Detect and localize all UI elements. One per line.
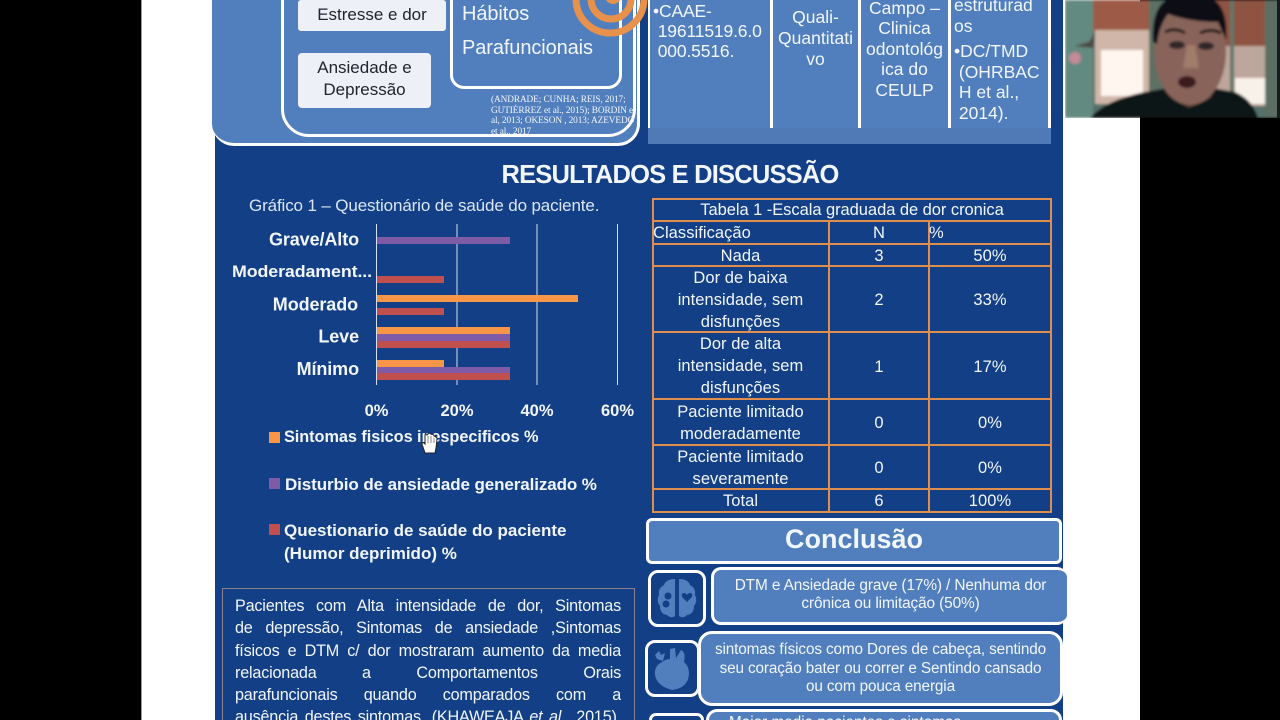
inner panel outline [281, 0, 636, 137]
row: low intensity: disfunções [701, 313, 780, 331]
poster background [215, 0, 1063, 720]
column: study type: vo [806, 49, 825, 69]
icon: hand cursor [422, 432, 438, 454]
conclusion box: anxiety: DTM e Ansiedade grave (17%) / Nenhuma dor [735, 577, 1046, 594]
box: anxiety and depression [298, 53, 431, 108]
row: high intensity: disfunções [701, 379, 780, 397]
conclusion box: physical symptoms: seu coração bater ou correr e Sentindo cansado [720, 660, 1041, 676]
table: chronic pain scale: N [873, 224, 885, 242]
column: CAAE: •CAAE- [653, 1, 712, 21]
person [1090, 0, 1258, 118]
column: instruments: H et al., [959, 82, 1019, 102]
bar chart [232, 224, 634, 420]
discussion lines: físicos e DTM c/ dor mostraram aumento da media [235, 642, 621, 660]
panel: introduction [212, 0, 640, 146]
table: chronic pain scale: 0 [874, 414, 884, 432]
discussion lines [235, 597, 621, 720]
table: chronic pain scale: 50% [973, 247, 1007, 265]
legend item: health questionnaire: (Humor deprimido) % [284, 544, 457, 563]
citation: GUTIÉRREZ et al., 2015); BORDIN et [491, 106, 635, 116]
table: chronic pain scale: % [929, 224, 944, 242]
header row: Classificação [653, 224, 751, 242]
column: instruments: (OHRBAC [959, 62, 1040, 82]
table: chronic pain scale: 17% [973, 358, 1007, 376]
axis labels: 60% [601, 402, 634, 420]
legend item: health questionnaire [269, 521, 566, 563]
table: chronic pain scale: 100% [969, 492, 1011, 510]
column: location: Clinica [878, 18, 931, 38]
box: stress and pain [298, 0, 446, 31]
conclusion box: anxiety [711, 567, 1067, 625]
row: none: Nada [721, 247, 760, 265]
column: instruments [951, 0, 1048, 128]
conclusion box: cut off [706, 709, 1062, 720]
text box: discussion paragraph [222, 588, 635, 720]
column: instruments: 2014). [959, 102, 1008, 122]
heading: parafunctional habits: Parafuncionais [462, 37, 593, 59]
bars [377, 237, 578, 380]
column: CAAE: 19611519.6.0 [658, 21, 762, 41]
axis labels: 0% [365, 402, 389, 420]
heading: results and discussion: RESULTADOS E DISCUSSÃO [501, 161, 839, 189]
column: study type [773, 0, 858, 128]
table borders [652, 198, 1052, 513]
category labels: Moderado [273, 294, 358, 314]
discussion lines: parafuncionais quando comparados com a [235, 686, 621, 704]
row: severely limited: Paciente limitado [677, 448, 804, 466]
row: severely limited: severamente [693, 470, 788, 488]
category labels: Leve [318, 326, 359, 346]
table: chronic pain scale: 0% [978, 459, 1002, 477]
axis labels: 40% [520, 402, 554, 420]
column: instruments: os [954, 16, 972, 36]
row: low intensity [678, 269, 803, 331]
axis labels: 20% [440, 402, 474, 420]
box: parafunctional habits [450, 0, 622, 89]
conclusion box: physical symptoms: ou com pouca energia [806, 678, 955, 695]
row: total: Total [723, 492, 758, 510]
legend item: physical symptoms: Sintomas fisicos inespecificos % [284, 428, 538, 446]
column: location [861, 0, 948, 128]
table: chronic pain scale: 1 [874, 358, 884, 376]
discussion lines: de depressão, Sintomas de ansiedade ,Sintomas [235, 619, 621, 637]
box: anxiety and depression: Depressão [323, 80, 406, 99]
row: moderately limited: Paciente limitado [677, 403, 804, 421]
category labels [232, 230, 372, 379]
table: chronic pain scale [652, 198, 1052, 513]
heading: conclusion: Conclusão [785, 524, 923, 554]
legend item: health questionnaire: Questionario de saúde do paciente [284, 521, 566, 540]
chart title: Gráfico 1 – Questionário de saúde do paciente. [249, 196, 599, 215]
box: stress and pain: Estresse e dor [317, 5, 427, 24]
heading: parafunctional habits [462, 3, 593, 59]
row: moderately limited: moderadamente [680, 425, 801, 443]
white background rules [648, 0, 1051, 128]
icon: third conclusion [649, 713, 704, 720]
citation [491, 95, 635, 136]
column: location: odontológ [866, 39, 943, 59]
table: chronic pain scale: 0% [978, 414, 1002, 432]
webcam video [1065, 0, 1277, 118]
column: instruments: •DC/TMD [954, 41, 1028, 61]
footer band [648, 128, 1051, 144]
conclusion box: anxiety: crônica ou limitação (50%) [801, 595, 980, 612]
conclusion box: physical symptoms [698, 631, 1063, 706]
row: low intensity: Dor de baixa [693, 269, 788, 287]
room background [1065, 0, 1280, 118]
table title: Tabela 1 -Escala graduada de dor cronica [700, 201, 1004, 219]
row: moderately limited [677, 403, 804, 443]
legend [269, 428, 597, 563]
column: CAAE: 000.5516. [658, 41, 734, 61]
citation: al, 2013; OKESON , 2013; AZEVEDO [491, 116, 634, 126]
table: chronic pain scale: 3 [874, 247, 884, 265]
column: location: CEULP [875, 80, 934, 100]
row: high intensity: Dor de alta [700, 335, 781, 353]
citation: (ANDRADE; CUNHA; REIS, 2017; [491, 95, 626, 105]
icon: heart [645, 640, 700, 697]
table: chronic pain scale: 33% [973, 291, 1007, 309]
row: severely limited [677, 448, 804, 488]
icon: orange target [572, 0, 648, 36]
column: CAAE [650, 0, 770, 128]
axis labels [365, 402, 634, 420]
heading: conclusion [646, 518, 1062, 564]
discussion lines: Pacientes com Alta intensidade de dor, Sintomas [235, 597, 621, 615]
category labels: Moderadament... [232, 262, 372, 281]
gridlines [376, 224, 618, 385]
table: chronic pain scale: 0 [874, 459, 884, 477]
row: high intensity [678, 335, 803, 397]
white slide page [141, 0, 1140, 720]
category labels: Mínimo [297, 359, 359, 379]
discussion lines: relacionada a Comportamentos Orais [235, 664, 621, 682]
column: study type: Quali- [792, 7, 839, 27]
panel: methodology columns [648, 0, 1051, 144]
table: chronic pain scale: 2 [874, 291, 884, 309]
category labels: Grave/Alto [269, 230, 359, 250]
conclusion box: physical symptoms: sintomas físicos como Dores de cabeça, sentindo [715, 641, 1046, 658]
column: location: ica do [881, 59, 928, 79]
row: high intensity: intensidade, sem [678, 357, 803, 375]
table: chronic pain scale: 6 [874, 492, 884, 510]
legend item: anxiety disorder: Disturbio de ansiedade generalizado % [285, 475, 597, 494]
column: study type: Quantitati [778, 28, 853, 48]
row: low intensity: intensidade, sem [678, 291, 803, 309]
video frame [1065, 0, 1280, 118]
box: anxiety and depression: Ansiedade e [317, 58, 412, 77]
heading: parafunctional habits: Hábitos [462, 3, 529, 25]
webcam noise edge [1277, 0, 1280, 118]
icon: brain [648, 570, 706, 627]
